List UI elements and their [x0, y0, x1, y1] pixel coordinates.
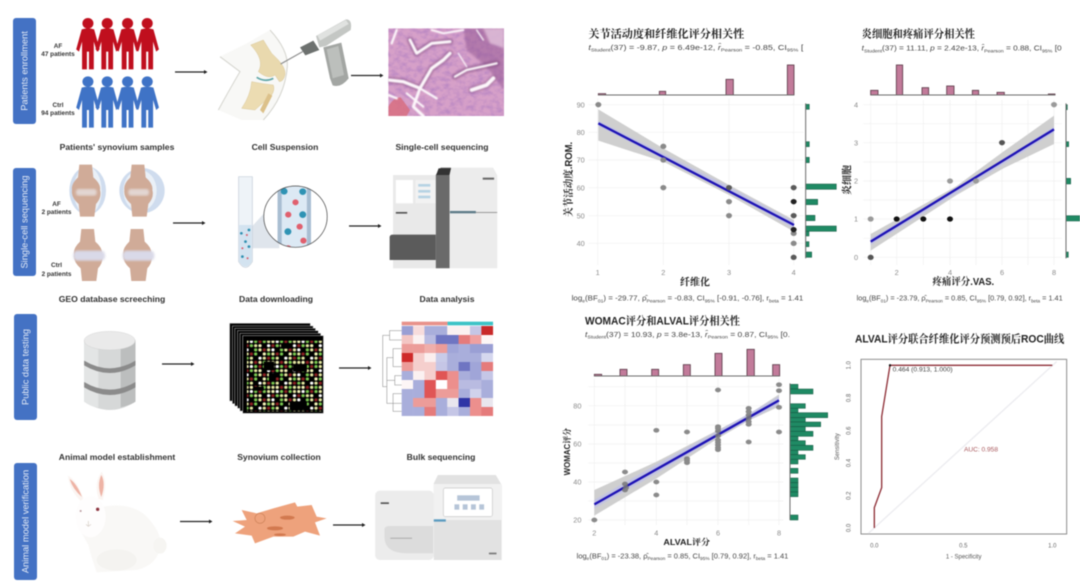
icon: test tube and magnified cells	[239, 177, 327, 267]
axis tick labels: 0.8	[847, 393, 853, 402]
stats footer: plot 1: e	[582, 298, 585, 303]
icon: knee with biopsy drill	[218, 19, 351, 120]
subtitle: plot 3 statistics: Student	[587, 335, 607, 340]
axis tick labels: 90	[577, 100, 585, 109]
chart: top marginal histogram	[594, 349, 780, 376]
heading: cell suspension: Cell Suspension	[252, 142, 318, 152]
icon: control patients in blue	[76, 76, 159, 128]
heading: bulk sequencing: Bulk sequencing	[407, 452, 475, 462]
heading: single-cell sequencing: Single-cell sequencing	[395, 142, 489, 152]
label: AUC value: AUC: 0.958	[964, 448, 999, 454]
text: Ctrl 2 patients: Ctrl	[51, 262, 62, 269]
chart: right marginal histogram	[806, 103, 836, 258]
subtitle: plot 1 statistics: p = 6.49e-12, r̂	[662, 43, 720, 52]
stats footer: plot 1: [-0.91, -0.76], r	[715, 294, 770, 303]
title: plot 1: 关节活动度和纤维化评分相关性	[588, 25, 744, 41]
text: AF 47 patients: AF	[54, 43, 62, 50]
axis tick labels: 8	[1052, 268, 1056, 277]
panel: single-cell sequencing label	[13, 168, 36, 276]
stats footer: plot 2: beta	[1031, 298, 1041, 303]
axis tick labels: 80	[577, 128, 585, 137]
subtitle: plot 2 statistics: p = 2.42e-13, r̂	[930, 44, 984, 53]
icon: synovial fibroblasts	[233, 502, 327, 543]
heading: synovium collection: Synovium collection	[237, 452, 321, 462]
axis tick labels: 6	[716, 529, 720, 538]
left workflow column	[13, 18, 504, 580]
subtitle: plot 2 statistics: t	[862, 44, 865, 53]
axis tick labels	[854, 100, 1056, 277]
title: plot 4: ALVAL评分联合纤维化评分预测预后ROC曲线	[855, 332, 1064, 346]
panel: WOMAC vs ALVAL plot	[561, 313, 828, 561]
stats footer: plot 3: = 0.85, CI	[665, 551, 700, 560]
axis tick labels: 4	[948, 268, 952, 277]
icon: bulk sequencer	[375, 475, 502, 560]
axis tick labels: 1	[854, 215, 858, 224]
axis tick labels: 2	[895, 268, 899, 277]
stats footer: plot 2: 95%	[977, 298, 986, 303]
subtitle: plot 2 statistics: Pearson	[984, 48, 1004, 53]
x axis label: ALVAL评分	[663, 536, 710, 547]
subtitle: plot 2 statistics: 95%	[1042, 48, 1052, 53]
stats footer: plot 1: = -0.83, CI	[665, 294, 705, 303]
axis tick labels: 60	[577, 183, 585, 192]
subtitle: plot 3 statistics: [0.	[778, 330, 790, 339]
axis tick labels: 1.0	[847, 361, 853, 369]
arrow: suspension to sequencer	[349, 224, 382, 228]
stats footer: plot 1: log	[572, 294, 581, 303]
subtitle: plot 3 statistics: = 0.87, CI	[728, 330, 767, 339]
arrow: patients to biopsy	[175, 70, 208, 74]
axis tick labels: 50	[577, 211, 585, 220]
chart: top marginal histogram	[871, 65, 1055, 95]
panel: public data testing label: Public data testing	[20, 329, 30, 405]
axis tick labels: 4	[792, 268, 796, 277]
axis tick labels: 0.5	[959, 543, 968, 549]
arrow: download to analysis	[339, 366, 372, 370]
stats footer: plot 2: = 0.85, CI	[943, 294, 977, 303]
icon: AF joints with inflamed capsule	[69, 165, 165, 217]
stats footer: plot 1: 01	[598, 298, 604, 303]
title: plot 3: WOMAC评分和ALVAL评分相关性	[585, 313, 740, 327]
axis tick labels: 1	[596, 268, 600, 277]
axis tick labels: 0.6	[847, 426, 853, 435]
stats footer: plot 3: e	[587, 556, 590, 561]
text: AF 2 patients: 2 patients	[42, 209, 72, 216]
subtitle: plot 1 statistics: Pearson	[721, 48, 743, 53]
panel: public data testing label	[14, 314, 37, 420]
stats footer: plot 2: ) = -23.79, ρ̂	[886, 294, 928, 303]
subtitle: plot 1 statistics: t	[588, 43, 592, 52]
icon: AF patients in red	[76, 18, 159, 69]
arrow: biopsy to tissue	[351, 74, 384, 78]
stats footer: plot 1: beta	[769, 298, 779, 303]
stats footer: plot 2: (BF	[869, 294, 881, 303]
panel: inflammatory cells vs pain plot	[841, 25, 1080, 303]
panel: single-cell sequencing label: Single-cell sequencing	[20, 175, 30, 269]
stats footer: plot 1: (BF	[585, 294, 598, 303]
subtitle: plot 3 statistics: Pearson	[708, 335, 728, 340]
stats footer: plot 1: 95%	[705, 298, 715, 303]
x axis label: 疼痛评分.VAS.	[932, 275, 994, 288]
heading: GEO database screeching: GEO database screeching	[59, 294, 165, 304]
y axis label: WOMAC评分	[561, 428, 572, 475]
icon: microarray stack	[230, 323, 323, 413]
arrow: database to download	[162, 362, 194, 366]
axis tick labels: 3	[727, 268, 731, 277]
subtitle: plot 1 statistics: 95%	[787, 48, 798, 53]
y axis label: 关节活动度.ROM.	[562, 142, 575, 217]
axis tick labels: 2	[854, 177, 858, 186]
stats footer: plot 2: 01	[881, 298, 886, 303]
chart: right marginal histogram	[790, 383, 828, 520]
text: AF 47 patients: 47 patients	[41, 51, 75, 58]
axis tick labels: 0.4	[847, 458, 853, 467]
subtitle: plot 2 statistics: = 0.88, CI	[1004, 44, 1042, 53]
subtitle: plot 2 statistics: (37) = 11.11,	[882, 44, 930, 53]
stats footer: plot 1: Pearson	[647, 298, 666, 303]
stats footer: plot 3: (BF	[589, 551, 602, 560]
stats footer: plot 1: ) = -29.77, ρ̂	[603, 294, 649, 303]
axis tick labels: 0	[854, 253, 858, 262]
panel: animal model verification label: Animal model verification	[20, 470, 30, 573]
stats footer: plot 3: = 1.41	[765, 551, 788, 560]
subtitle: plot 1 statistics: [	[798, 43, 803, 52]
chart: scatter plot with fit	[863, 100, 1062, 265]
text: Ctrl 2 patients: 2 patients	[42, 271, 72, 278]
stats footer: plot 2: = 1.41	[1040, 294, 1063, 303]
subtitle: plot 1 statistics: (37) = -9.87,	[611, 43, 662, 52]
stats footer: plot 2: log	[857, 294, 866, 303]
axis tick labels: 0.2	[847, 491, 853, 500]
axis tick labels: 0.0	[847, 523, 853, 532]
subtitle: plot 3 statistics: t	[585, 330, 588, 339]
axis tick labels: 40	[577, 239, 585, 248]
subtitle: plot 1 statistics: Student	[591, 48, 611, 53]
image: synovium histology	[388, 28, 504, 116]
arrow: samples to suspension	[173, 221, 206, 225]
stats footer: plot 2: Pearson	[926, 298, 943, 303]
axis tick labels: 2	[661, 268, 665, 277]
axis tick labels: 8	[777, 529, 781, 538]
axis tick labels: 20	[573, 516, 581, 525]
axis tick labels	[577, 100, 796, 277]
axis tick labels: 1.0	[1048, 543, 1057, 549]
subtitle: plot 3 statistics: (37) = 10.93,	[606, 330, 657, 339]
y axis label: 炎细胞	[841, 165, 854, 195]
arrow: synovium to bulk sequencing	[333, 523, 366, 527]
axis tick labels: 4	[854, 100, 858, 109]
axis tick labels: 80	[573, 401, 581, 410]
x axis label: 纤维化	[680, 276, 710, 289]
stats footer: plot 3: ) = -23.38, ρ̂	[607, 551, 650, 560]
stats footer: plot 3: Pearson	[647, 556, 666, 561]
chart: top marginal histogram	[598, 65, 794, 95]
y axis label: Sensitivity	[835, 433, 841, 460]
stats footer: plot 3: 01	[601, 556, 607, 561]
heading: animal model establishment: Animal model establishment	[59, 452, 175, 462]
text: AF 2 patients: AF	[52, 201, 61, 208]
axis tick labels: 3	[854, 138, 858, 147]
panel: ROC curve plot	[835, 332, 1067, 561]
panel: range of motion vs fibrosis plot	[562, 25, 836, 303]
axis tick labels	[573, 401, 781, 538]
icon: database cylinder	[84, 331, 136, 410]
subtitle: plot 2 statistics: Student	[864, 48, 883, 53]
axis tick labels: 4	[654, 529, 658, 538]
chart: scatter plot with fit	[588, 378, 783, 525]
chart: ROC curve	[861, 359, 1067, 534]
panel: patients enrollment label	[13, 18, 36, 124]
heading: data downloading: Data downloading	[239, 294, 313, 304]
arrow: rabbit to synovium	[180, 520, 212, 524]
x axis label: 1 - Specificity	[946, 555, 981, 561]
axis tick labels: 70	[577, 156, 585, 165]
chart: right marginal histogram	[1066, 103, 1080, 258]
axis tick labels: 0.0	[870, 543, 879, 549]
icon: rabbit	[68, 472, 167, 572]
subtitle: plot 1 statistics: = -0.85, CI	[742, 43, 787, 52]
stats footer: plot 3: 95%	[700, 556, 710, 561]
heading: patients' synovium samples: Patients' synovium samples	[60, 142, 175, 152]
icon: single-cell sequencer	[390, 168, 497, 268]
axis tick labels	[847, 361, 1057, 549]
panel: patients enrollment label: Patients enrollment	[20, 31, 30, 111]
text: Ctrl 94 patients: 94 patients	[41, 110, 75, 117]
stats footer: plot 3: log	[577, 551, 586, 560]
stats footer: plot 2: e	[866, 298, 869, 303]
stats footer: plot 1: = 1.41	[779, 294, 803, 303]
axis tick labels: 60	[573, 440, 581, 449]
axis tick labels: 6	[1000, 268, 1004, 277]
subtitle: plot 3 statistics: p = 3.8e-13, r̂	[657, 330, 707, 339]
subtitle: plot 2 statistics: [0	[1052, 44, 1062, 53]
heading: data analysis: Data analysis	[420, 294, 475, 304]
stats footer: plot 3: [0.79, 0.92], r	[710, 551, 756, 560]
text: Ctrl 94 patients: Ctrl	[52, 102, 64, 109]
axis tick labels: 2	[592, 529, 596, 538]
chart: clustered heatmap	[383, 322, 493, 416]
label: best threshold: 0.464 (0.913, 1.000)	[893, 368, 953, 374]
stats footer: plot 2: [0.79, 0.92], r	[986, 294, 1032, 303]
subtitle: plot 3 statistics: 95%	[767, 335, 778, 340]
axis tick labels: 40	[573, 478, 581, 487]
panel: animal model verification label	[14, 463, 37, 580]
title: plot 2: 炎细胞和疼痛评分相关性	[862, 25, 975, 41]
chart: scatter plot with fit	[588, 98, 803, 265]
stats footer: plot 3: beta	[756, 556, 766, 561]
icon: control joints	[73, 229, 154, 281]
